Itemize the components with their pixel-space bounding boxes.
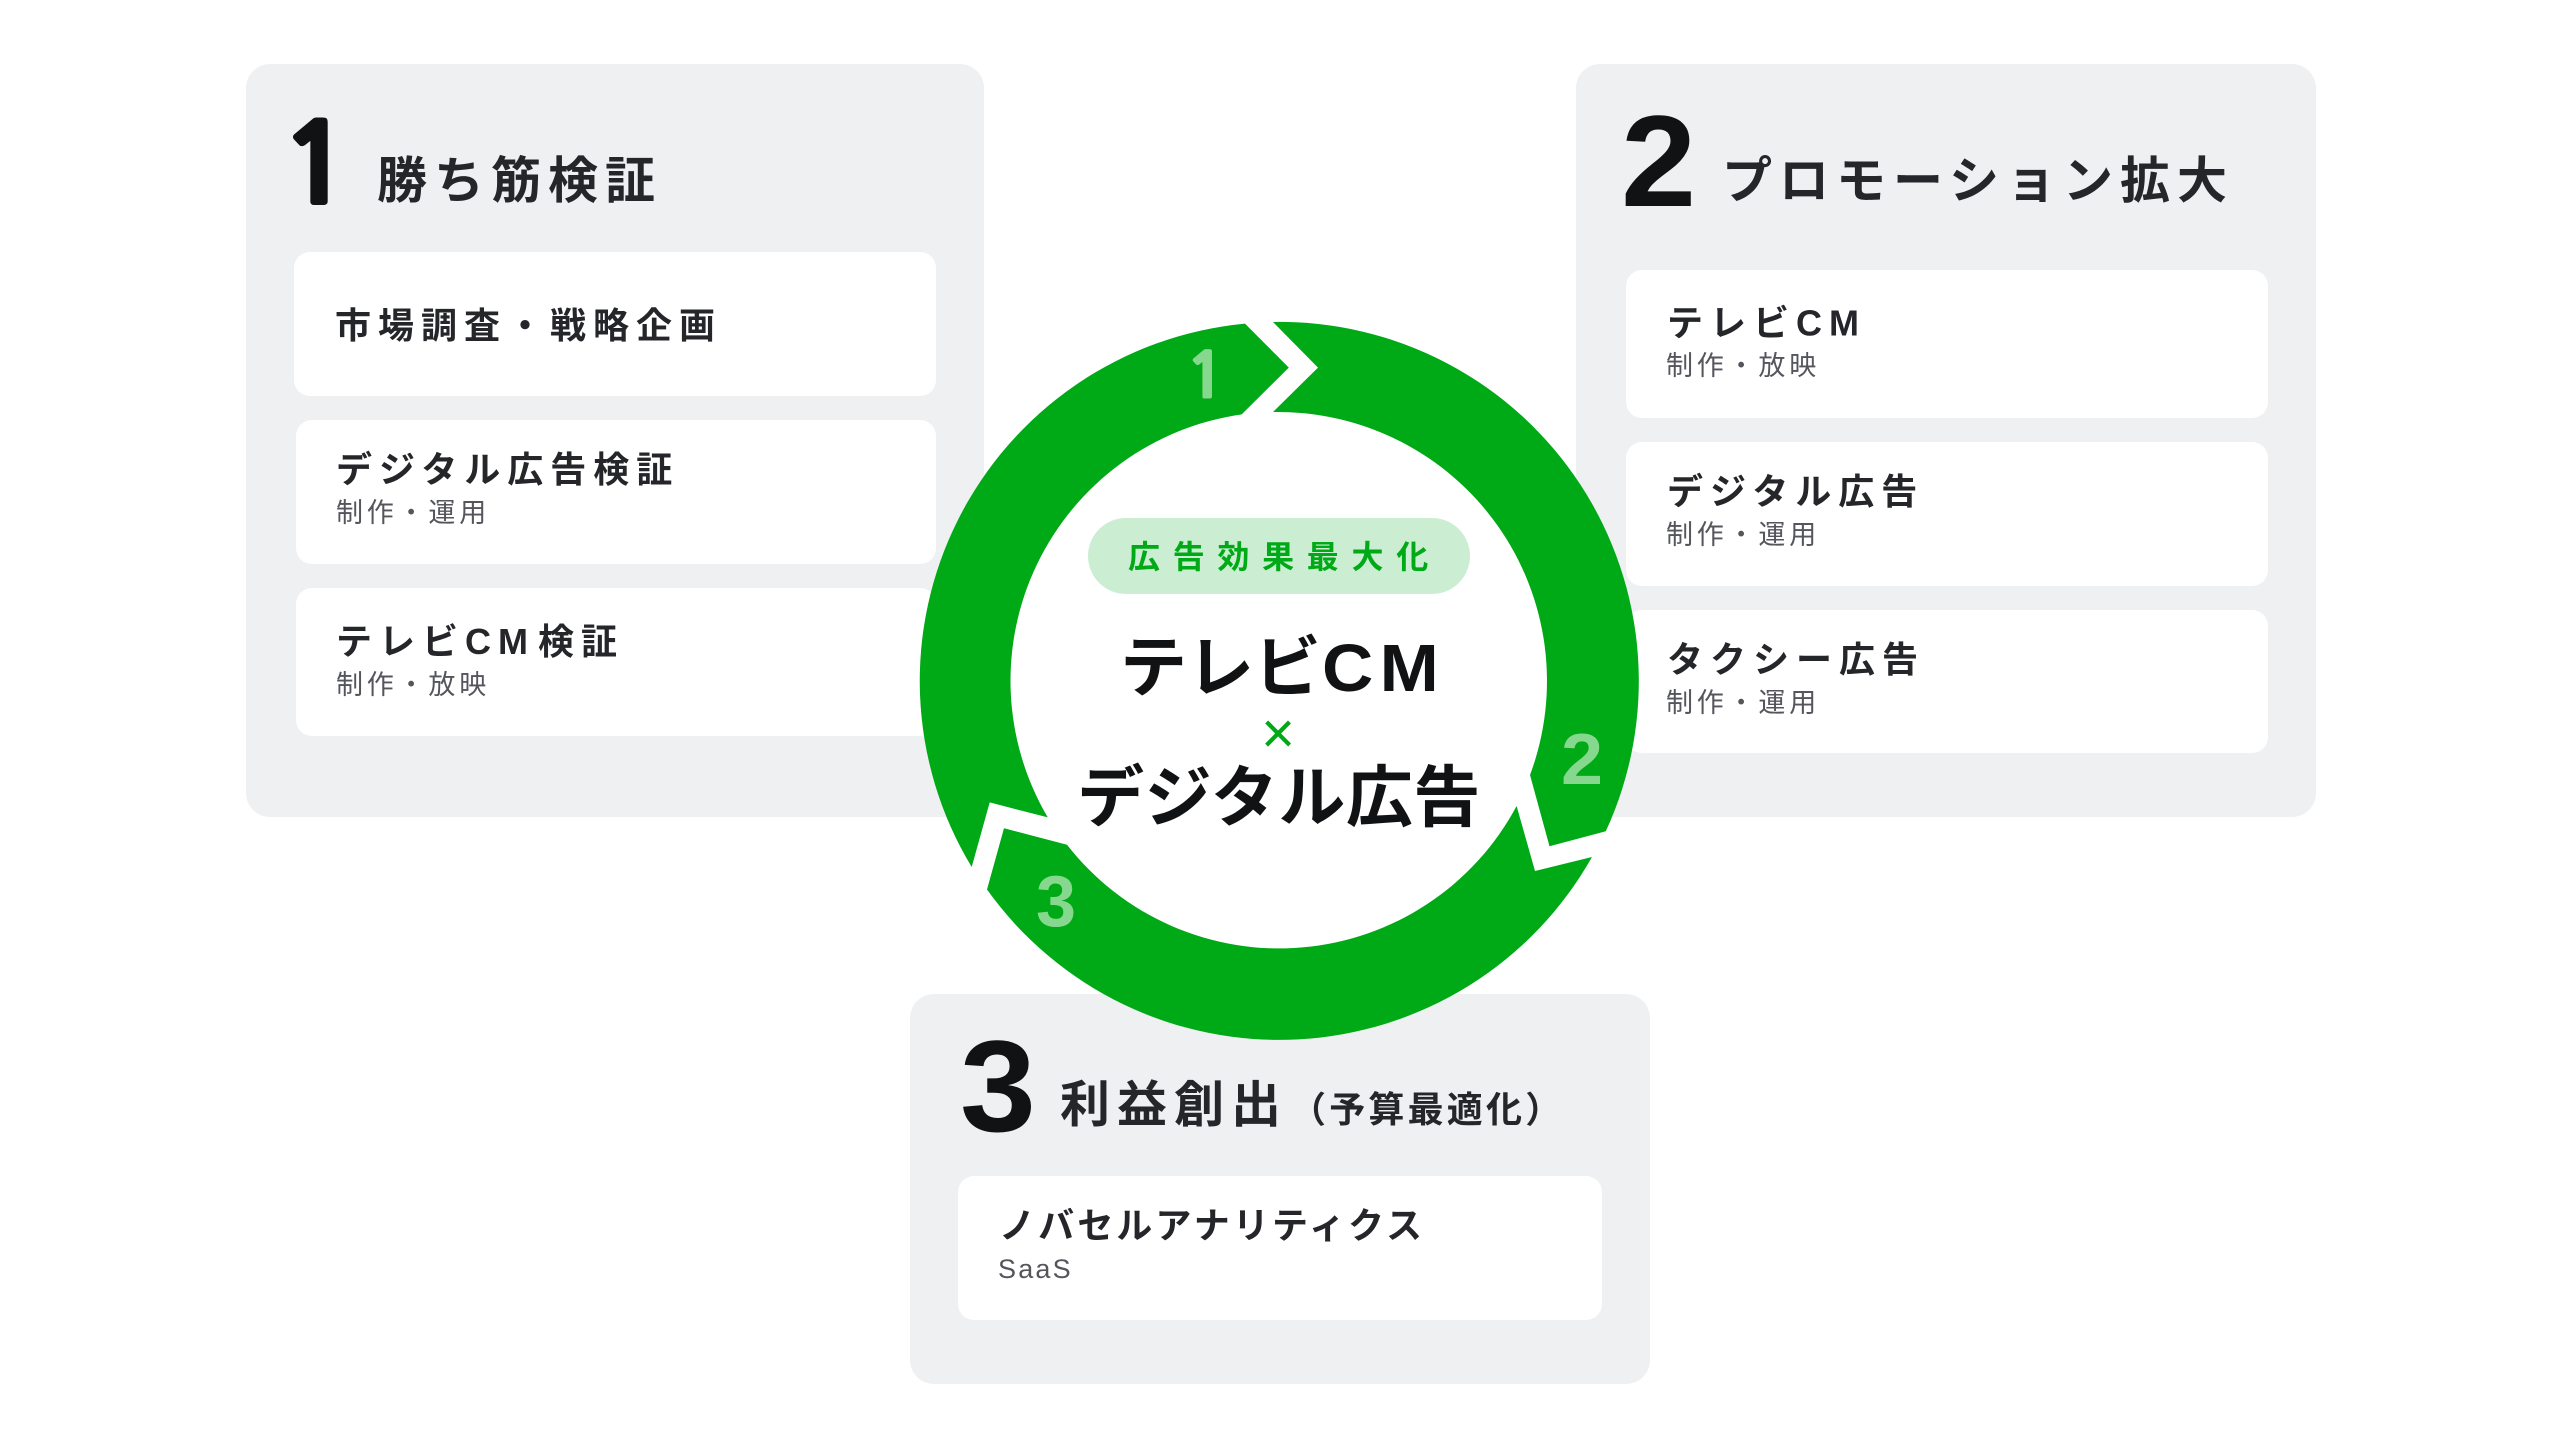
ring number 2: 2 (1561, 719, 1603, 800)
card: タクシー広告 (1626, 610, 2268, 753)
center title line 1: CM (1322, 631, 1445, 706)
center title line 1: テレビ (1120, 631, 1321, 706)
card: 市場調査・戦略企画 (294, 252, 936, 396)
ring segment 3 (987, 806, 1592, 1040)
card: テレビCM (1626, 270, 2268, 418)
panel 3: 利益創出 (910, 994, 1650, 1384)
panel 1: 勝ち筋検証 (246, 64, 984, 817)
cycle ring (920, 322, 1639, 1040)
ring segment 2 (1273, 322, 1639, 846)
panel 2 number: 2 (1621, 89, 1696, 234)
card: ノバセルアナリティクス: SaaS (998, 1254, 1073, 1284)
card: ノバセルアナリティクス (958, 1176, 1602, 1320)
ring number 3: 3 (1036, 862, 1076, 942)
center title line 1 (1120, 631, 1445, 706)
ring segment 1 (920, 324, 1289, 867)
center multiply sign: × (1261, 701, 1295, 766)
card: デジタル広告検証: デジタル広告検証 (336, 449, 679, 490)
card: デジタル広告 (1626, 442, 2268, 586)
pill: 広告効果最大化: 広告効果最大化 (1128, 539, 1441, 575)
panel 1 number: 1 (280, 111, 353, 220)
card: テレビCM: 制作・放映 (1666, 351, 1820, 381)
panel 2: プロモーション拡大 (1576, 64, 2316, 817)
card: デジタル広告検証: 制作・運用 (336, 498, 490, 528)
card: 市場調査・戦略企画: 市場調査・戦略企画 (335, 305, 722, 346)
card: デジタル広告検証 (296, 420, 936, 564)
card: デジタル広告: デジタル広告 (1667, 471, 1924, 512)
card: デジタル広告: 制作・運用 (1666, 520, 1820, 550)
card: テレビCM検証 (296, 588, 936, 736)
card: ノバセルアナリティクス: ノバセルアナリティクス (999, 1205, 1425, 1246)
panel 2 heading: プロモーション拡大 (1722, 153, 2234, 209)
panel 3 heading note: （予算最適化） (1290, 1089, 1564, 1130)
card: タクシー広告: 制作・運用 (1666, 688, 1820, 718)
pill: 広告効果最大化 (1088, 518, 1470, 594)
panel 3 number: 3 (960, 1014, 1036, 1159)
card: テレビCM検証: 制作・放映 (336, 670, 490, 700)
ring number 1: 1 (1185, 345, 1226, 407)
center title line 2: デジタル広告 (1077, 761, 1481, 836)
card: タクシー広告: タクシー広告 (1667, 639, 1925, 680)
panel 3 heading: 利益創出 (1060, 1077, 1288, 1133)
card: テレビCM: テレビCM (1667, 302, 1866, 344)
card: テレビCM検証: テレビCM検証 (336, 621, 624, 662)
white disc behind ring (922, 324, 1636, 1038)
panel 1 heading: 勝ち筋検証 (377, 153, 662, 209)
